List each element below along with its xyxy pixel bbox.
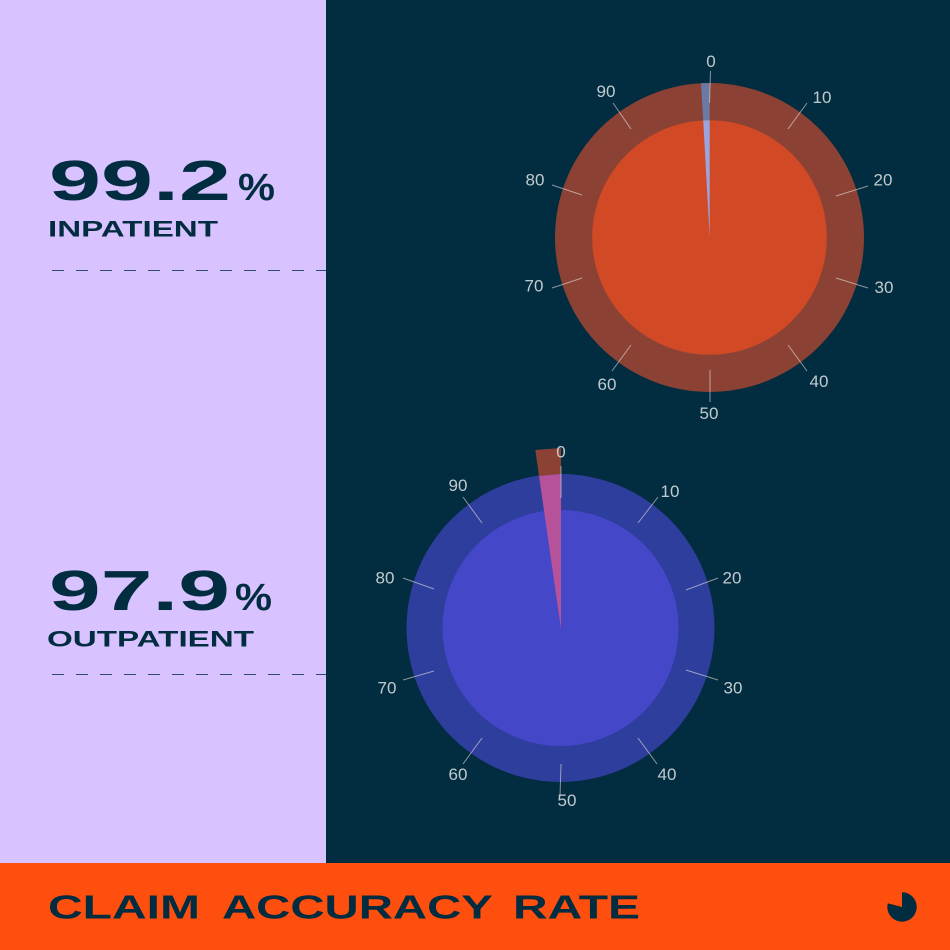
scale labels: 70 [378,678,396,698]
stat: inpatient [48,149,275,242]
outpatient value: 97.9 [49,559,230,623]
scale labels: 40 [810,372,828,391]
chart: outpatient radial dial [376,442,742,810]
outpatient label: OUTPATIENT [47,626,254,652]
outpatient percent sign: % [235,577,272,619]
outer ring [406,474,714,782]
scale labels: 0 [556,442,566,462]
scale labels [376,442,742,810]
scale labels [525,52,893,423]
scale labels: 10 [813,88,831,107]
wedge outside dial [535,448,561,476]
stat: outpatient [47,559,272,652]
scale labels: 60 [449,765,467,784]
outer ring [555,83,864,392]
tick marks [403,466,718,796]
scale labels: 50 [700,404,718,423]
inner disc [442,510,678,746]
scale labels: 50 [558,791,576,810]
inpatient value: 99.2 [49,149,231,213]
scale labels: 30 [724,678,742,698]
wedge in ring [701,83,710,120]
inpatient label: INPATIENT [48,216,218,242]
scale labels: 90 [597,82,615,101]
scale labels: 80 [376,568,394,588]
scale labels: 40 [658,765,676,784]
scale labels: 30 [875,278,893,297]
scale labels: 20 [723,568,741,588]
footer bar [0,863,950,950]
wedge in disc [703,120,710,238]
scale labels: 90 [449,476,467,495]
panel: lavender sidebar [0,0,326,864]
icon: pie chart [887,892,917,922]
title: RATE [513,888,640,926]
scale labels: 0 [706,52,716,71]
title: CLAIM [48,888,200,926]
inpatient percent sign: % [238,167,275,209]
scale labels: 70 [525,276,543,296]
title: ACCURACY [222,888,493,926]
scale labels: 60 [598,375,616,394]
scale labels: 10 [661,482,679,501]
wedge inside dial [539,474,561,629]
scale labels: 80 [526,170,544,190]
inner disc [592,120,827,355]
tick marks [552,71,868,402]
chart: inpatient radial dial [525,52,893,423]
scale labels: 20 [874,170,892,190]
